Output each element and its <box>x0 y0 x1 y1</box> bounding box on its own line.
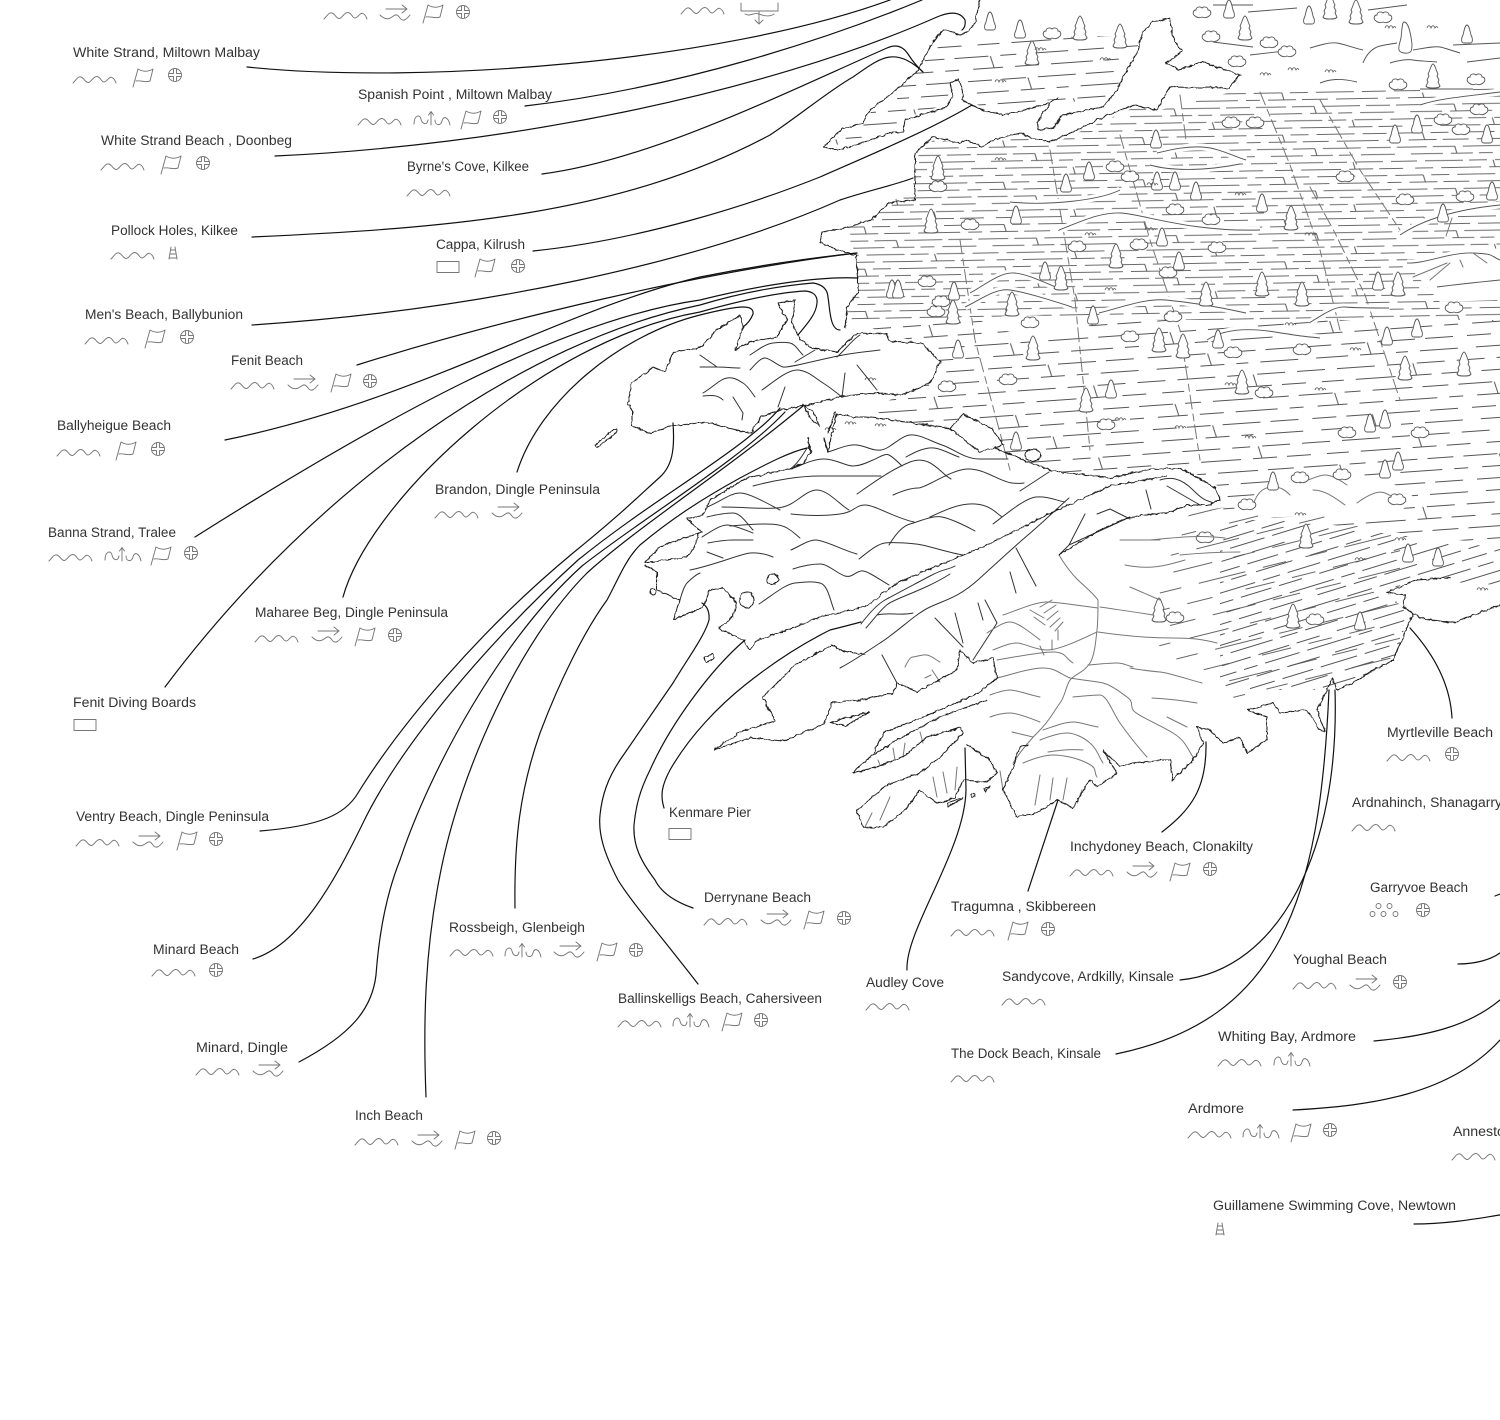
location: Banna Strand, Tralee <box>48 525 198 565</box>
location: Minard Beach: Minard Beach <box>153 942 239 958</box>
location: Men's Beach, Ballybunion: Men's Beach, Ballybunion <box>85 307 243 323</box>
location: Tragumna, Skibbereen: Tragumna , Skibbereen <box>951 899 1096 915</box>
location: Rossbeigh, Glenbeigh <box>449 920 642 961</box>
location: The Dock Beach, Kinsale <box>951 1046 1101 1082</box>
icons: unnamed location with pier at top <box>681 3 778 24</box>
grass tufts <box>825 26 1488 590</box>
location: White Strand, Miltown Malbay <box>73 45 261 87</box>
field texture: Cork diagonal fields <box>1220 520 1500 690</box>
location: Cappa, Kilrush: Cappa, Kilrush <box>436 237 525 253</box>
location: Sandycove, Ardkilly, Kinsale <box>1002 969 1174 1005</box>
location: Maharee Beg, Dingle Peninsula <box>255 605 448 646</box>
location: Minard, Dingle: Minard, Dingle <box>196 1040 288 1056</box>
coast: Sheep's Head <box>852 700 987 773</box>
location: Byrne's Cove, Kilkee <box>407 159 529 196</box>
location: White Strand Beach, Doonbeg: White Strand Beach , Doonbeg <box>101 133 292 149</box>
location: Pollock Holes, Kilkee: Pollock Holes, Kilkee <box>111 223 238 239</box>
lakes and small islands <box>650 414 1041 806</box>
coast: Clare to Kerry <box>820 0 1240 328</box>
location: Tragumna, Skibbereen <box>951 899 1096 940</box>
trees <box>887 0 1497 630</box>
location: Whiting Bay, Ardmore <box>1218 1029 1356 1066</box>
location: Ardmore: Ardmore <box>1188 1101 1244 1117</box>
location: Derrynane Beach <box>704 890 850 929</box>
location: Ventry Beach, Dingle Peninsula <box>76 809 269 850</box>
location: Audley Cove: Audley Cove <box>866 975 944 991</box>
location: Pollock Holes, Kilkee <box>111 223 238 259</box>
hills near Kenmare head <box>1253 475 1400 505</box>
bushes <box>918 7 1488 625</box>
location: Brandon, Dingle Peninsula <box>435 482 600 518</box>
location: Fenit Diving Boards <box>73 695 196 730</box>
location: Audley Cove <box>866 975 944 1010</box>
location: Men's Beach, Ballybunion <box>85 307 243 348</box>
location: Myrtleville Beach <box>1387 725 1493 761</box>
field boundary lines <box>960 92 1400 470</box>
location: Ballyheigue Beach <box>57 418 171 460</box>
location: Inchydoney Beach, Clonakilty: Inchydoney Beach, Clonakilty <box>1070 839 1254 855</box>
location: Fenit Beach <box>231 353 376 392</box>
location: Minard, Dingle <box>196 1040 288 1076</box>
icons: unnamed location at top left <box>324 5 470 23</box>
location: Inch Beach <box>355 1108 500 1149</box>
location: Youghal Beach <box>1293 952 1406 990</box>
field texture: sparse south Cork <box>1154 507 1400 698</box>
mountain detail lines <box>1413 212 1487 280</box>
location: Cappa, Kilrush <box>436 237 525 277</box>
location: Garryvoe Beach <box>1370 880 1468 916</box>
location: Ballinskelligs Beach, Cahersiveen: Ballinskelligs Beach, Cahersiveen <box>618 991 822 1007</box>
location: Maharee Beg, Dingle Peninsula: Maharee Beg, Dingle Peninsula <box>255 605 448 621</box>
location: Kenmare Pier: Kenmare Pier <box>669 805 751 821</box>
island off Dingle <box>595 428 617 448</box>
leader lines from labels to map points <box>165 0 1500 1224</box>
location: Youghal Beach: Youghal Beach <box>1293 952 1387 968</box>
location: Ballyheigue Beach: Ballyheigue Beach <box>57 418 171 434</box>
location: The Dock Beach, Kinsale: The Dock Beach, Kinsale <box>951 1046 1101 1062</box>
location: Annestown <box>1452 1124 1500 1160</box>
location: Garryvoe Beach: Garryvoe Beach <box>1370 880 1468 896</box>
location: Kenmare Pier <box>669 805 751 840</box>
location: Brandon, Dingle Peninsula: Brandon, Dingle Peninsula <box>435 482 600 498</box>
field texture: central Kerry <box>872 320 1500 541</box>
location: Minard Beach <box>152 942 239 976</box>
location: Spanish Point, Miltown Malbay <box>358 87 553 129</box>
location: Guillamene Swimming Cove, Newtown <box>1213 1198 1456 1235</box>
location: Derrynane Beach: Derrynane Beach <box>704 890 811 906</box>
coast: Beara peninsula <box>714 645 997 755</box>
thin contour lines of south Cork <box>865 537 1240 827</box>
location: Ardmore <box>1188 1101 1336 1142</box>
coast: Toe Head to Kinsale <box>1003 578 1500 817</box>
location: Ventry Beach, Dingle Peninsula: Ventry Beach, Dingle Peninsula <box>76 809 269 825</box>
location: Myrtleville Beach: Myrtleville Beach <box>1387 725 1493 741</box>
rolling hill lines <box>965 5 1500 340</box>
map of the south-west coast <box>595 0 1500 828</box>
location: Ardnahinch, Shanagarry <box>1352 795 1500 831</box>
location: Fenit Beach: Fenit Beach <box>231 353 303 369</box>
location: Inch Beach: Inch Beach <box>355 1108 423 1124</box>
location: Rossbeigh, Glenbeigh: Rossbeigh, Glenbeigh <box>449 920 585 936</box>
field texture: west Clare and north Kerry <box>820 80 1500 325</box>
field texture: north Clare <box>835 36 1138 145</box>
location: Whiting Bay, Ardmore: Whiting Bay, Ardmore <box>1218 1029 1356 1045</box>
location: Banna Strand, Tralee: Banna Strand, Tralee <box>48 525 176 541</box>
coast: Iveragh and Kenmare river <box>645 414 1220 650</box>
coast: Mizen Head <box>857 733 997 828</box>
spits on the south Dingle shore <box>803 405 835 452</box>
location: Sandycove, Ardkilly, Kinsale: Sandycove, Ardkilly, Kinsale <box>1002 969 1174 985</box>
location: White Strand Beach, Doonbeg <box>101 133 292 174</box>
location: Guillamene Swimming Cove, Newtown: Guillamene Swimming Cove, Newtown <box>1213 1198 1456 1214</box>
inland ridge lines <box>680 335 1213 683</box>
location: Inchydoney Beach, Clonakilty <box>1070 839 1254 881</box>
location: White Strand, Miltown Malbay: White Strand, Miltown Malbay <box>73 45 261 61</box>
white gaps in field texture <box>980 248 1500 590</box>
location: Spanish Point, Miltown Malbay: Spanish Point , Miltown Malbay <box>358 87 553 103</box>
location: Ballinskelligs Beach, Cahersiveen <box>618 991 822 1031</box>
location: Fenit Diving Boards: Fenit Diving Boards <box>73 695 196 711</box>
location: Byrne's Cove, Kilkee: Byrne's Cove, Kilkee <box>407 159 529 175</box>
coastline <box>595 0 1500 828</box>
coast: Dingle peninsula <box>628 300 940 433</box>
